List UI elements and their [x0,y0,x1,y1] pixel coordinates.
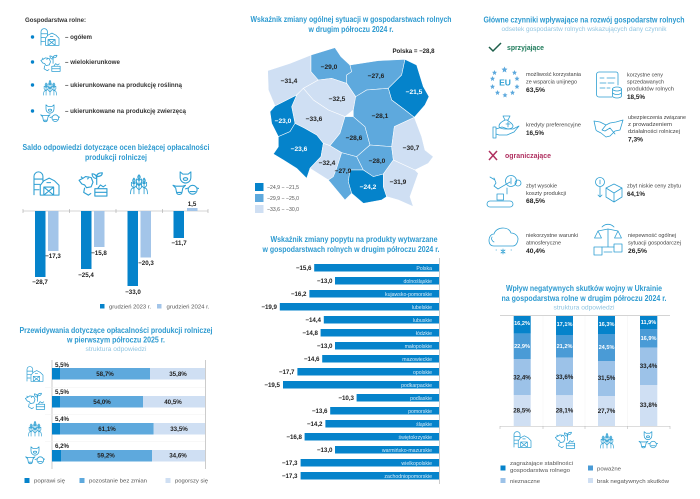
map values: −30,7 [403,145,420,152]
legend item: ogółem: – ogółem [65,35,92,41]
map legend: −33,6 − −30,0 [267,207,299,213]
horizontal bar chart: −14,6 [304,356,320,363]
factor: weather [526,233,578,255]
chart legend: brak negatywnych skutków [597,479,669,485]
favourable heading [489,43,544,52]
chart legend [100,304,210,310]
icons column [25,367,46,464]
bar chart: −25,4 [78,272,94,279]
map values: −21,5 [406,89,423,96]
panel: legend of farm types [25,18,187,122]
panel: wskaźnik zmiany ogólnej sytuacji [250,15,452,213]
horizontal bar chart: kujawsko-pomorskie [385,292,432,298]
map values: −27,6 [368,73,385,80]
horizontal bar chart: −19,5 [264,382,281,389]
map values: −28,6 [346,135,363,142]
stacked column chart: 28,1% [556,408,574,414]
factor: EU support: 63,5% [526,87,545,94]
stacked column chart: 16,2% [514,321,530,327]
horizontal bar chart: −13,0 [317,343,333,350]
limiting heading: ograniczające [505,153,551,160]
favourable heading: sprzyjające [507,45,544,52]
stacked bar chart: 59,2% [97,452,115,460]
factor: credit: kredyty preferencyjne [526,122,581,128]
horizontal bar chart: −15,6 [296,265,312,272]
map legend: −29,9 − −25,0 [267,196,299,202]
horizontal bar chart: −17,3 [282,473,298,480]
heading: w drugim półroczu 2024 r. [308,25,394,34]
factor: uncertainty: 26,5% [628,248,647,255]
map values: −32,5 [329,96,346,103]
horizontal bar chart: −16,2 [291,291,307,298]
icon: cloud and snow [489,228,518,254]
map values: −28,1 [372,113,389,120]
icon: production machine [487,176,521,207]
factor: credit [526,122,581,137]
stacked bar chart [45,360,206,469]
factor: credit: 16,5% [526,130,544,137]
factor: EU support: ze wsparcia unijnego [526,80,577,86]
factor: insurance: ubezpieczenia związane [628,115,686,121]
map values: −33,6 [306,116,323,123]
chart legend [500,461,669,485]
stacked bar chart: 54,0% [93,399,111,406]
factor: costs [526,184,566,205]
horizontal bar chart: pomorskie [408,409,432,415]
stacked bar chart: 35,8% [169,371,187,378]
icon: EU stars: EU [499,78,511,88]
map values: −28,0 [369,158,386,165]
bar chart: 1,5 [188,201,197,208]
stacked column chart: 33,4% [640,363,658,370]
legend heading: Gospodarstwa rolne: [25,18,86,24]
map values [275,64,423,191]
icons row [514,432,658,448]
horizontal bar chart: −19,9 [261,304,278,311]
horizontal bar chart: −13,0 [317,447,333,454]
icon: EU stars [490,66,520,98]
horizontal bar chart: lubuskie [413,318,432,324]
stacked column chart: 11,9% [641,320,656,326]
horizontal bar chart: podkarpackie [401,383,432,389]
stacked bar chart: 5,5% [55,389,70,396]
factor: uncertainty [628,233,681,255]
map values: −24,2 [360,184,377,191]
icon: price list with coins [596,72,622,98]
icon: price and box [596,178,622,202]
factor: uncertainty: niepewność ogólnej [628,233,676,239]
horizontal bar chart: −16,8 [286,434,303,441]
horizontal bar chart: świętokrzyskie [399,435,432,441]
map of Poland [268,48,433,207]
heading: w pierwszym półroczu 2025 r. [66,336,165,344]
map values: −32,4 [319,160,336,167]
legend item: wielokierunkowe [31,55,121,71]
chart legend: pozostanie bez zmian [89,478,147,484]
chart legend: grudzień 2023 r. [109,304,151,310]
bar chart [23,201,208,296]
horizontal bar chart: śląskie [416,422,432,428]
panel: wskaźnik zmiany popytu [261,235,440,484]
subheading: odsetek gospodarstw rolnych wskazujących dany czynnik [502,26,667,33]
factor: insurance: z prowadzeniem [628,122,673,128]
map values: −23,6 [291,146,308,153]
factor: low prices: 64,1% [627,191,645,198]
factor: prices: korzystne ceny [627,72,663,78]
chart legend: nieznaczne [510,479,540,485]
factor: weather: 40,4% [526,248,545,255]
bar chart: −28,7 [32,279,48,286]
horizontal bar chart: −10,3 [338,395,355,402]
stacked column chart: 28,5% [513,408,531,414]
factor: prices: 18,5% [627,94,645,101]
stacked column chart: 16,3% [599,322,614,328]
stacked column chart: 16,9% [641,336,656,342]
stacked bar chart: 61,1% [98,426,116,433]
map legend: −24,9 − −21,5 [267,185,299,191]
bar chart: −15,8 [91,250,107,257]
stacked column chart [500,316,670,429]
horizontal bar chart: −17,7 [279,369,295,376]
map legend [255,183,299,213]
stacked column chart: 31,5% [598,375,616,382]
stacked bar chart: 5,4% [55,416,70,423]
stacked column chart: 22,9% [514,344,530,350]
horizontal bar chart: dolnośląskie [403,279,432,285]
stacked bar chart: 58,7% [96,371,114,378]
legend item: produkcja roślinna: – ukierunkowane na produkcję roślinną [65,83,183,89]
heading: Saldo odpowiedzi dotyczące ocen bieżącej opłacalności [22,143,210,152]
heading: produkcji rolniczej [85,153,147,162]
heading: Wpływ negatywnych skutków wojny w Ukrainie [506,284,662,293]
subheading: struktura odpowiedzi [554,304,614,312]
icon: scales [594,224,622,255]
horizontal bar chart: małopolskie [405,344,432,350]
horizontal bar chart: wielkopolskie [401,461,432,467]
legend item: produkcja zwierzęca: – ukierunkowane na produkcję zwierzęcą [65,109,187,115]
horizontal bar chart: −17,3 [282,460,298,467]
horizontal bar chart: −14,2 [307,421,323,428]
horizontal bar chart: łódzkie [416,331,432,337]
map values: −29,0 [321,64,338,71]
heading: w gospodarstwach rolnych w drugim półroczu 2024 r. [262,245,440,254]
map values: −23,0 [275,118,292,125]
heading: Przewidywania dotyczące opłacalności produkcji rolniczej [20,326,212,335]
factor: costs: 68,5% [526,198,545,205]
heading: Wskaźnik zmiany ogólnej sytuacji w gospodarstwach rolnych [250,15,452,24]
factor: prices: produktów rolnych [627,86,674,92]
factor: insurance: 7,3% [628,136,643,144]
factor: uncertainty: sytuacji gospodarczej [628,240,681,246]
factor: insurance: działalności rolniczej [628,129,680,135]
map values: −27,9 [335,168,352,175]
factor: EU support [526,72,581,94]
factor: weather: atmosferyczne [526,240,561,246]
stacked column chart: 17,1% [557,322,572,328]
subheading: struktura odpowiedzi [86,346,146,353]
map values: −31,9 [390,179,407,186]
bar chart: −17,3 [45,253,61,260]
factor: costs: zbyt wysokie [526,184,557,190]
horizontal bar chart: Polska [416,266,432,272]
factor: prices [627,72,674,101]
bar chart: −20,3 [138,260,154,267]
chart legend: grudzień 2024 r. [166,304,210,310]
chart legend [24,478,208,484]
horizontal bar chart: opolskie [413,370,432,376]
panel: saldo opłacalności [22,143,210,310]
panel: wpływ wojny w Ukrainie [500,284,670,485]
horizontal bar chart: −14,4 [305,317,322,324]
legend item: wielokierunkowe: – wielokierunkowe [65,60,121,66]
heading: Wskaźnik zmiany popytu na produkty wytwarzane [270,235,438,244]
horizontal bar chart: −13,6 [312,408,328,415]
icon: hand with money bag [493,116,519,138]
legend item: produkcja roślinna [31,80,183,95]
bar chart: −11,7 [171,240,187,247]
factor: prices: sprzedawanych [627,80,664,86]
map values: −31,4 [281,78,298,85]
stacked bar chart: 33,5% [170,426,188,433]
stacked bar chart: 40,5% [164,399,182,406]
stacked column chart: 27,7% [598,408,616,415]
stacked bar chart: 6,2% [55,443,70,450]
legend item: ogółem [31,29,92,45]
factor: EU support: możliwość korzystania [526,72,581,78]
chart legend: zagrażające stabilności [510,461,573,467]
national value: Polska = −28,8 [392,48,435,55]
stacked bar chart: 34,6% [169,452,187,460]
stacked column chart: 33,8% [640,402,658,409]
horizontal bar chart: warmińsko-mazurskie [382,448,432,454]
icons row [34,172,200,196]
horizontal bar chart: podlaskie [410,396,432,402]
stacked column chart: 24,5% [599,345,614,351]
factor: low prices [627,184,681,198]
legend item: produkcja zwierzęca [31,105,187,122]
horizontal bar chart: −14,8 [302,330,319,337]
panel: główne czynniki [484,16,686,255]
limiting heading [489,151,551,160]
factor: low prices: zbyt niskie ceny zbytu [627,184,681,190]
horizontal bar chart: zachodniopomorskie [384,474,432,480]
icon: handshake [594,120,623,137]
heading: na gospodarstwa rolne w drugim półroczu 2024 r. [502,294,666,303]
factor: insurance [628,115,686,144]
panel: przewidywania opłacalności [20,326,212,484]
chart legend: gospodarstwa rolnego [510,468,570,474]
chart legend: pogorszy się [175,478,208,484]
bar chart: −33,0 [125,289,141,296]
chart legend: poprawi się [34,478,65,484]
stacked bar chart: 5,5% [55,362,70,369]
stacked column chart: 21,2% [557,344,572,350]
factor: costs: koszty produkcji [526,191,566,197]
chart legend: poważne [597,466,621,472]
horizontal bar chart: lubelskie [412,305,432,311]
stacked column chart: 32,4% [513,374,531,382]
horizontal bar chart: −13,0 [317,278,333,285]
horizontal bar chart [261,258,439,484]
horizontal bar chart: mazowieckie [402,357,432,363]
stacked column chart: 33,6% [556,374,574,381]
factor: weather: niekorzystne warunki [526,233,578,239]
